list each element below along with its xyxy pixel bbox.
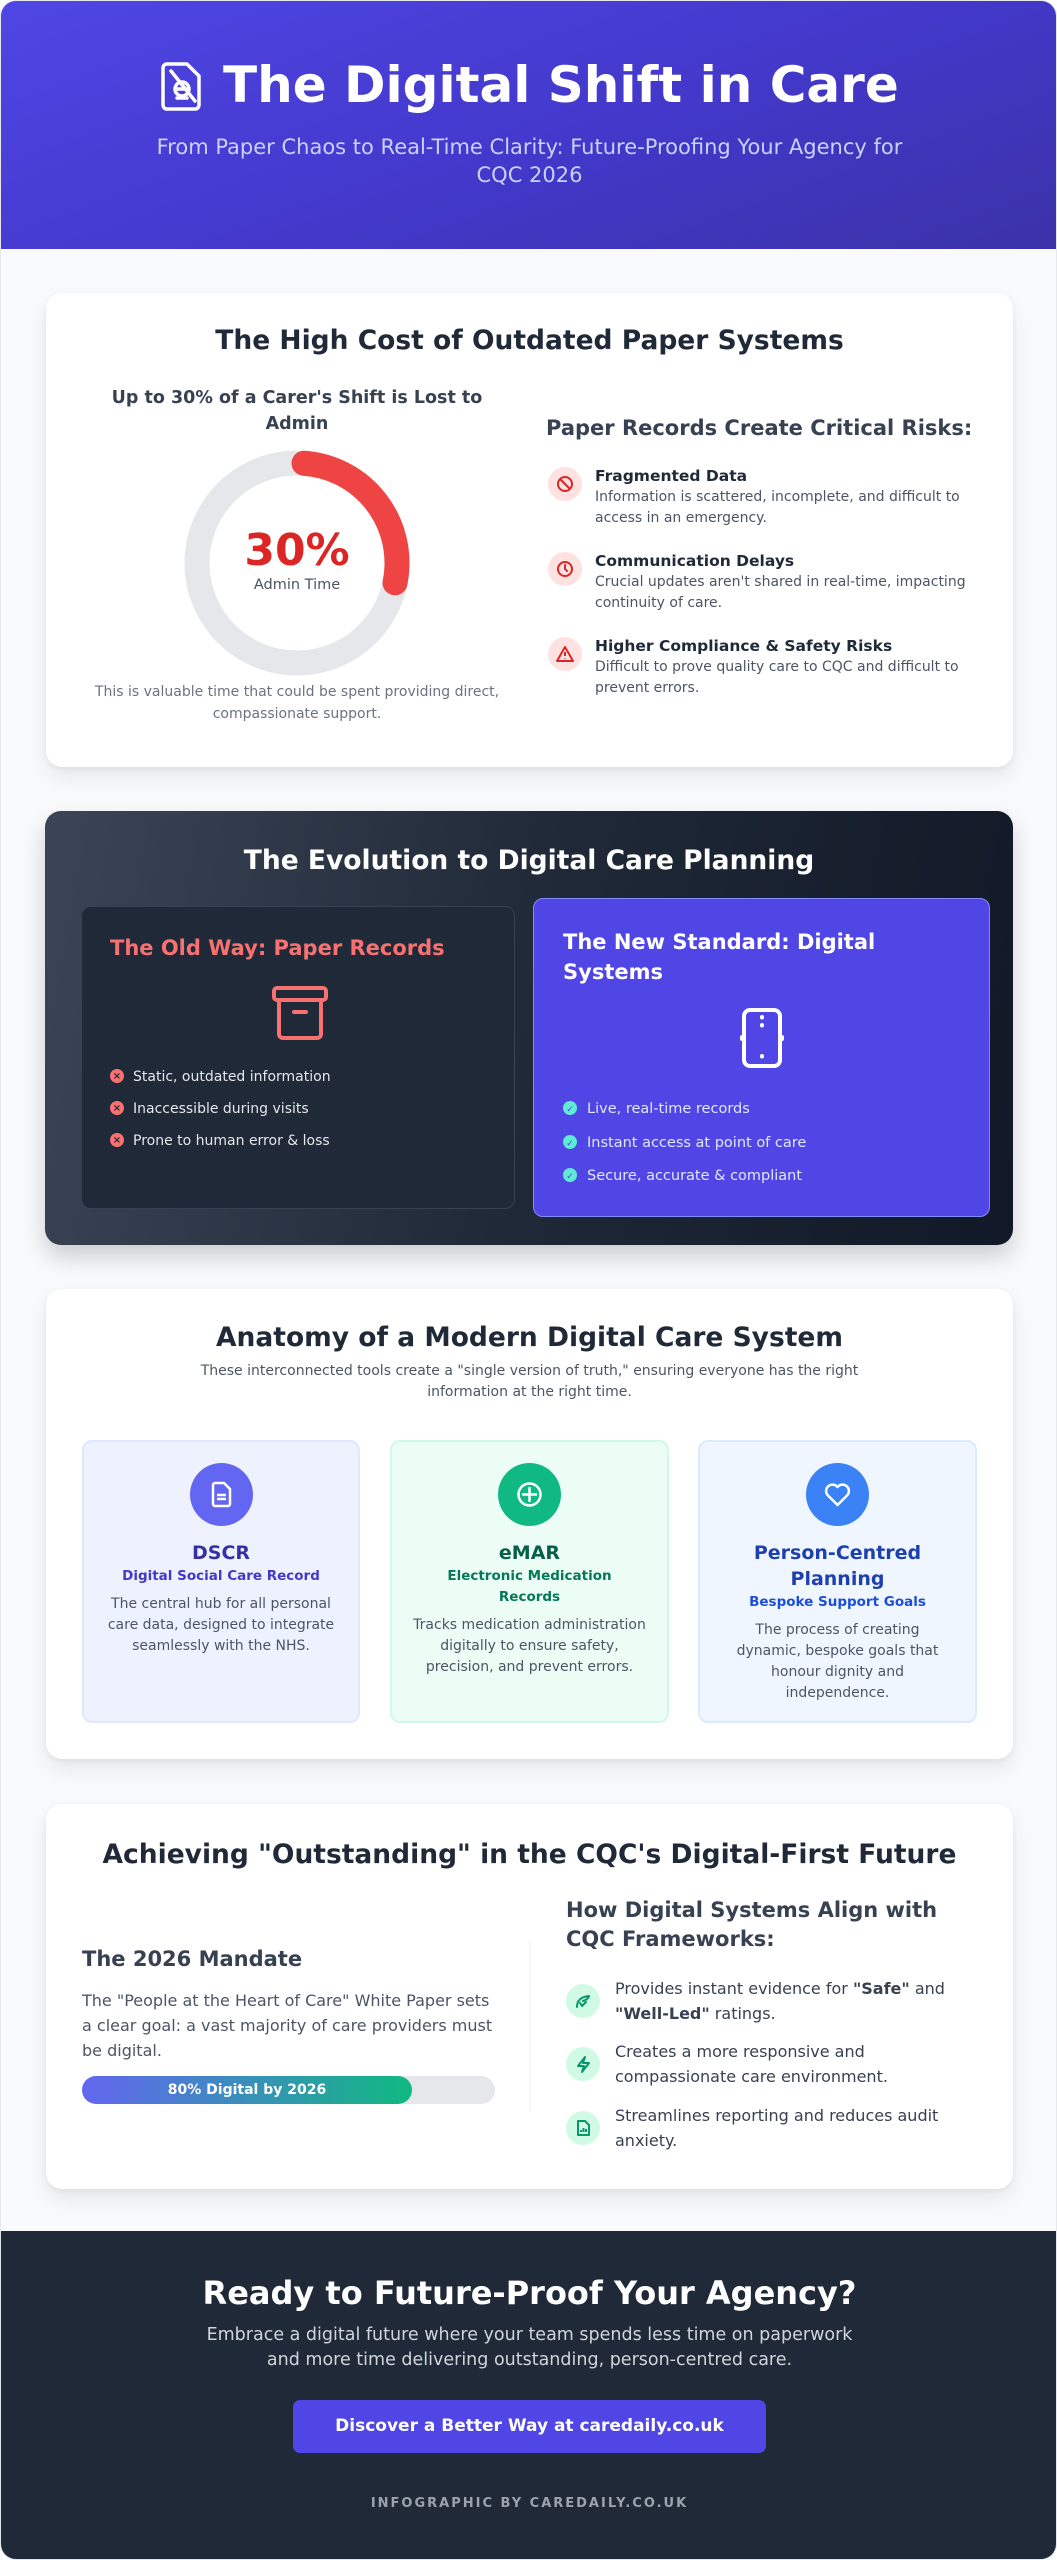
left: 2026 mandate: The "People at the Heart of Care" White Paper sets a clear goal: a vast majority of care providers must be digital. bbox=[82, 1991, 492, 2060]
icon: heart bbox=[806, 1463, 869, 1526]
card: person-centred planning: The process of creating dynamic, bespoke goals that honour dignity and independence. bbox=[737, 1622, 938, 1701]
new standard list bbox=[563, 1101, 806, 1184]
card: old way bbox=[81, 906, 515, 1209]
progress bar bbox=[82, 2076, 495, 2104]
risk: compliance: Higher Compliance & Safety Risks bbox=[595, 637, 892, 655]
footer text: Embrace a digital future where your team spends less time on paperwork and more time delivering outstanding, person-centred care. bbox=[207, 2325, 852, 2370]
button bbox=[293, 2400, 766, 2453]
left: 2026 mandate bbox=[82, 1947, 495, 2104]
item: reporting: Streamlines reporting and reduces audit anxiety. bbox=[615, 2106, 938, 2150]
item: responsive: Creates a more responsive and compassionate care environment. bbox=[615, 2042, 888, 2086]
risk: communication delays bbox=[548, 552, 966, 611]
old way list bbox=[110, 1069, 331, 1149]
left column: admin time bbox=[94, 388, 499, 722]
risk: communication delays: Communication Delays bbox=[595, 552, 794, 570]
old way title: The Old Way: Paper Records bbox=[110, 936, 445, 960]
credit: INFOGRAPHIC BY CAREDAILY.CO.UK bbox=[371, 2496, 688, 2511]
panel: anatomy bbox=[46, 1289, 1013, 1759]
button: Discover a Better Way at caredaily.co.uk bbox=[335, 2416, 724, 2436]
card: DSCR: The central hub for all personal care data, designed to integrate seamlessly with the NHS. bbox=[108, 1596, 334, 1654]
icon: medication bbox=[498, 1463, 561, 1526]
old way list: Static, outdated information bbox=[133, 1069, 331, 1085]
new standard list: Instant access at point of care bbox=[587, 1135, 806, 1151]
new standard list: ✓ bbox=[566, 1172, 574, 1182]
right column: risks bbox=[546, 416, 972, 696]
old way list: Prone to human error & loss bbox=[133, 1133, 330, 1149]
heading: The High Cost of Outdated Paper Systems bbox=[215, 325, 844, 356]
stat heading: Up to 30% of a Carer's Shift is Lost to Admin bbox=[112, 388, 482, 434]
old way list: Inaccessible during visits bbox=[133, 1101, 309, 1117]
risks heading: Paper Records Create Critical Risks: bbox=[546, 416, 972, 440]
new standard list: Live, real-time records bbox=[587, 1101, 750, 1117]
progress bar: 80% Digital by 2026 bbox=[168, 2082, 326, 2098]
panel: high cost of paper bbox=[46, 293, 1013, 767]
footer heading: Ready to Future-Proof Your Agency? bbox=[203, 2274, 856, 2312]
donut chart: Admin Time bbox=[254, 577, 340, 593]
old way list: × bbox=[113, 1071, 121, 1082]
card: person-centred planning bbox=[698, 1440, 977, 1723]
card: new standard bbox=[533, 898, 990, 1217]
card: person-centred planning: Person-Centred Planning bbox=[754, 1542, 921, 1590]
risk: communication delays: Crucial updates aren't shared in real-time, impacting continuity of care. bbox=[595, 574, 966, 611]
subtitle: From Paper Chaos to Real-Time Clarity: Future-Proofing Your Agency for CQC 2026 bbox=[157, 135, 902, 187]
new standard list: Secure, accurate & compliant bbox=[587, 1168, 802, 1184]
card: eMAR: eMAR bbox=[499, 1542, 560, 1564]
footer: call to action bbox=[1, 2231, 1057, 2560]
old way list: × bbox=[113, 1103, 121, 1114]
card: DSCR bbox=[82, 1440, 360, 1723]
title: The Digital Shift in Care bbox=[223, 56, 899, 114]
panel: achieving outstanding bbox=[46, 1804, 1013, 2189]
icon: document bbox=[161, 62, 201, 111]
card: eMAR: Electronic Medication Records bbox=[447, 1568, 612, 1605]
new standard title: The New Standard: Digital Systems bbox=[563, 930, 875, 984]
header bbox=[1, 1, 1057, 249]
new standard list: ✓ bbox=[566, 1105, 574, 1115]
right: alignment list: How Digital Systems Align with CQC Frameworks: bbox=[566, 1898, 937, 1951]
card: person-centred planning: Bespoke Support Goals bbox=[749, 1594, 926, 1610]
card: eMAR: Tracks medication administration digitally to ensure safety, precision, and prevent errors. bbox=[413, 1617, 646, 1675]
card: DSCR: Digital Social Care Record bbox=[122, 1568, 320, 1584]
right: alignment list bbox=[566, 1898, 945, 2150]
heading: Anatomy of a Modern Digital Care System bbox=[216, 1322, 843, 1353]
risk: compliance: Difficult to prove quality care to CQC and difficult to prevent errors. bbox=[595, 659, 959, 696]
icon: document bbox=[190, 1463, 253, 1526]
item: safe & well-led: Provides instant evidence for "Safe" and "Well-Led" ratings. bbox=[615, 1979, 945, 2023]
donut chart bbox=[184, 450, 410, 676]
old way list: × bbox=[113, 1135, 121, 1146]
panel: evolution bbox=[45, 811, 1013, 1245]
intro text: These interconnected tools create a "single version of truth," ensuring everyone has the right information at the right time. bbox=[201, 1363, 858, 1400]
risk: compliance bbox=[548, 637, 959, 696]
new standard list: ✓ bbox=[566, 1139, 574, 1149]
icon: archive box bbox=[272, 986, 328, 1040]
icon: tablet bbox=[740, 1008, 784, 1068]
caption: This is valuable time that could be spent providing direct, compassionate support. bbox=[95, 684, 499, 722]
card: eMAR bbox=[390, 1440, 669, 1723]
donut chart: 30% bbox=[244, 525, 350, 576]
risk: fragmented data: Information is scattered, incomplete, and difficult to access in an emergency. bbox=[595, 489, 960, 526]
risk: fragmented data bbox=[548, 467, 960, 526]
risk: fragmented data: Fragmented Data bbox=[595, 467, 747, 485]
card: DSCR: DSCR bbox=[192, 1542, 250, 1564]
left: 2026 mandate: The 2026 Mandate bbox=[82, 1947, 302, 1971]
heading: The Evolution to Digital Care Planning bbox=[244, 845, 814, 876]
heading: Achieving "Outstanding" in the CQC's Digital-First Future bbox=[103, 1839, 956, 1870]
